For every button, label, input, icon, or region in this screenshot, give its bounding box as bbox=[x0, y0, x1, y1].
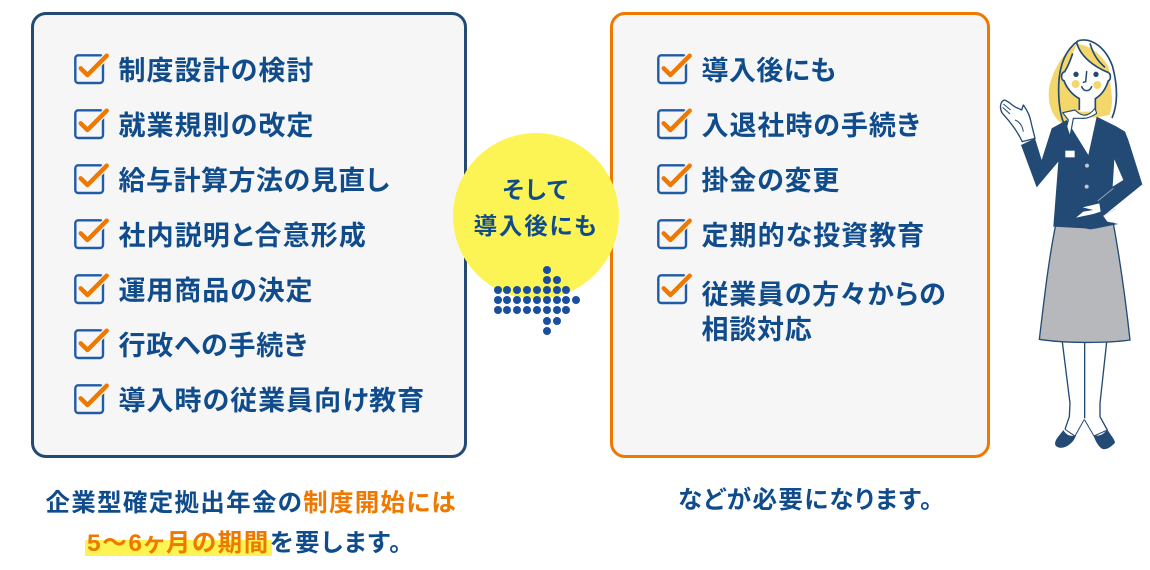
left caption line 1: 企業型確定拠出年金の制度開始には bbox=[46, 490, 457, 517]
left list item 2: 就業規則の改定 bbox=[118, 111, 314, 141]
circle text bbox=[474, 177, 598, 239]
hair back yellow bbox=[1049, 44, 1112, 124]
left list item 4: 社内説明と合意形成 bbox=[118, 221, 367, 251]
left list item 6: 行政への手続き bbox=[118, 331, 308, 361]
face and neck bbox=[1062, 44, 1110, 112]
left caption line 2: 5〜6ヶ月の期間を要します。 bbox=[87, 530, 403, 557]
shoes bbox=[1055, 430, 1076, 448]
right list item 2: 入退社時の手続き bbox=[702, 111, 921, 141]
raised hand bbox=[1000, 100, 1035, 142]
cuff lines bbox=[1098, 188, 1115, 216]
name tag bbox=[1065, 151, 1075, 157]
buttons bbox=[1085, 164, 1089, 168]
right list item 1: 導入後にも bbox=[702, 56, 837, 86]
left list item 1: 制度設計の検討 bbox=[118, 56, 314, 86]
waist hand bbox=[1076, 203, 1101, 218]
left list item 7: 導入時の従業員向け教育 bbox=[118, 386, 425, 416]
panel: after adoption checklist bbox=[610, 12, 990, 458]
gap between arm and body bbox=[1113, 159, 1123, 187]
right list item 5: 従業員の方々からの bbox=[702, 280, 946, 310]
circle text: 導入後にも bbox=[474, 213, 598, 239]
circle text: そして bbox=[503, 177, 569, 203]
right list item 5: 相談対応 bbox=[702, 315, 812, 345]
skirt bbox=[1039, 223, 1130, 342]
caption highlight bbox=[85, 540, 272, 556]
right caption: などが必要になります。 bbox=[678, 487, 934, 514]
jacket bbox=[1021, 117, 1142, 229]
legs bbox=[1062, 342, 1107, 430]
right list item 3: 掛金の変更 bbox=[702, 166, 840, 196]
panel: before adoption checklist bbox=[31, 12, 467, 458]
right list item 4: 定期的な投資教育 bbox=[702, 221, 925, 251]
right list item 5 bbox=[702, 280, 946, 345]
left list item 3: 給与計算方法の見直し bbox=[118, 166, 390, 196]
left list item 5: 運用商品の決定 bbox=[118, 276, 313, 306]
hair outline bbox=[1059, 40, 1116, 122]
scarf bbox=[1063, 108, 1097, 137]
